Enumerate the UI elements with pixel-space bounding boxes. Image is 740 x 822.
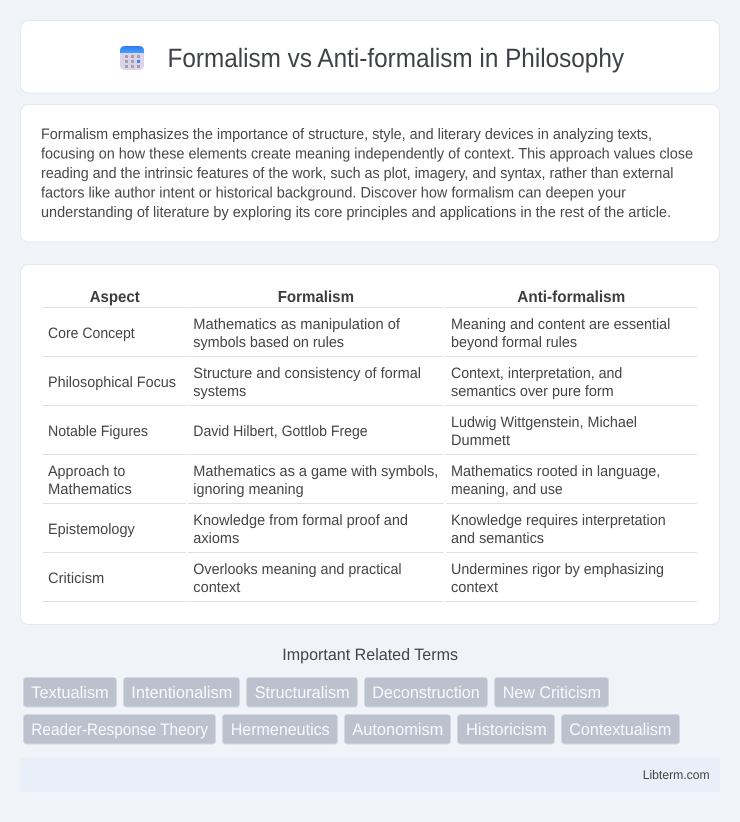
table row: Epistemology: axioms xyxy=(193,530,239,547)
tags: related terms: Structuralism xyxy=(255,683,350,702)
table row: Core Concept xyxy=(43,316,697,357)
table row: Notable Figures xyxy=(43,414,697,455)
table row: Notable Figures: Dummett xyxy=(451,432,511,449)
text block: intro: Formalism emphasizes the importance of structure, style, and literary devices in analyzing texts, xyxy=(41,126,652,143)
text block: intro xyxy=(41,126,693,221)
table row: Criticism: Criticism xyxy=(48,570,104,587)
table row: Epistemology xyxy=(43,512,697,553)
text block: intro: focusing on how these elements create meaning independently of context. This approach values close xyxy=(41,146,693,162)
table row: Approach to Mathematics: ignoring meaning xyxy=(193,481,304,498)
icon: calendar xyxy=(120,46,144,70)
tags: related terms: Intentionalism xyxy=(131,683,232,702)
table row: Epistemology: Knowledge from formal proof and xyxy=(193,512,408,529)
table row: Criticism: context xyxy=(451,579,499,596)
table row: Approach to Mathematics: Mathematics rooted in language, xyxy=(451,463,660,480)
footer: Libterm.com xyxy=(643,768,710,782)
text block: intro: understanding of literature by exploring its core principles and applications in the rest of the article. xyxy=(41,204,671,221)
table row: Epistemology: and semantics xyxy=(451,530,544,547)
table row: Core Concept: Mathematics as manipulation of xyxy=(193,316,401,333)
text block: intro: reading and the intrinsic features of the work, such as plot, imagery, and syntax, rather than external xyxy=(41,165,674,182)
table row: Core Concept: symbols based on rules xyxy=(193,334,344,351)
tags: related terms: Historicism xyxy=(466,720,547,739)
table row: Philosophical Focus: Structure and consistency of formal xyxy=(193,365,421,382)
table row: Criticism: Overlooks meaning and practical xyxy=(193,561,402,578)
table row: Notable Figures: Ludwig Wittgenstein, Michael xyxy=(451,414,637,431)
table row: Epistemology: Knowledge requires interpretation xyxy=(451,512,666,529)
table row: Criticism: Undermines rigor by emphasizing xyxy=(451,561,664,578)
table row: Epistemology: Epistemology xyxy=(48,521,135,538)
panel: title card xyxy=(20,20,720,93)
panel: intro paragraph xyxy=(20,104,720,242)
table row: Notable Figures: Notable Figures xyxy=(48,423,148,440)
table row: Criticism: context xyxy=(193,579,241,596)
tags: related terms: Autonomism xyxy=(352,720,443,739)
table row: Core Concept: beyond formal rules xyxy=(451,334,577,351)
table row: Criticism xyxy=(43,561,697,602)
tags: related terms: New Criticism xyxy=(503,683,601,702)
tags: related terms: Textualism xyxy=(31,683,109,702)
table row: Approach to Mathematics: Mathematics as a game with symbols, xyxy=(193,463,438,480)
table header row: Anti-formalism xyxy=(517,289,625,306)
footer xyxy=(20,758,720,792)
table row: Philosophical Focus xyxy=(43,365,697,406)
table header row: Formalism xyxy=(278,289,354,306)
table row: Approach to Mathematics: Mathematics xyxy=(48,481,132,498)
table row: Notable Figures: David Hilbert, Gottlob Frege xyxy=(193,423,368,440)
table row: Approach to Mathematics: meaning, and use xyxy=(451,481,563,498)
panel: comparison table xyxy=(20,264,720,624)
table row: Core Concept: Core Concept xyxy=(48,325,135,342)
table row: Philosophical Focus: Philosophical Focus xyxy=(48,374,176,391)
table row: Approach to Mathematics: Approach to xyxy=(48,463,125,480)
tags: related terms: Reader-Response Theory xyxy=(31,720,209,739)
table row: Philosophical Focus: systems xyxy=(193,383,246,400)
tags: related terms xyxy=(24,678,680,744)
title: Formalism vs Anti-formalism in Philosophy xyxy=(168,43,625,73)
heading: related terms: Important Related Terms xyxy=(282,646,458,664)
tags: related terms: Hermeneutics xyxy=(231,720,330,739)
text block: intro: factors like author intent or historical background. Discover how formalism can deepen your xyxy=(41,184,626,202)
table header row: Aspect xyxy=(90,289,140,306)
table header row xyxy=(43,289,697,308)
tags: related terms: Deconstruction xyxy=(372,683,480,702)
tags: related terms: Contextualism xyxy=(569,720,671,739)
table row: Core Concept: Meaning and content are essential xyxy=(451,316,670,333)
table row: Philosophical Focus: semantics over pure form xyxy=(451,383,614,400)
table row: Philosophical Focus: Context, interpretation, and xyxy=(451,365,622,382)
table row: Approach to Mathematics xyxy=(43,463,697,504)
